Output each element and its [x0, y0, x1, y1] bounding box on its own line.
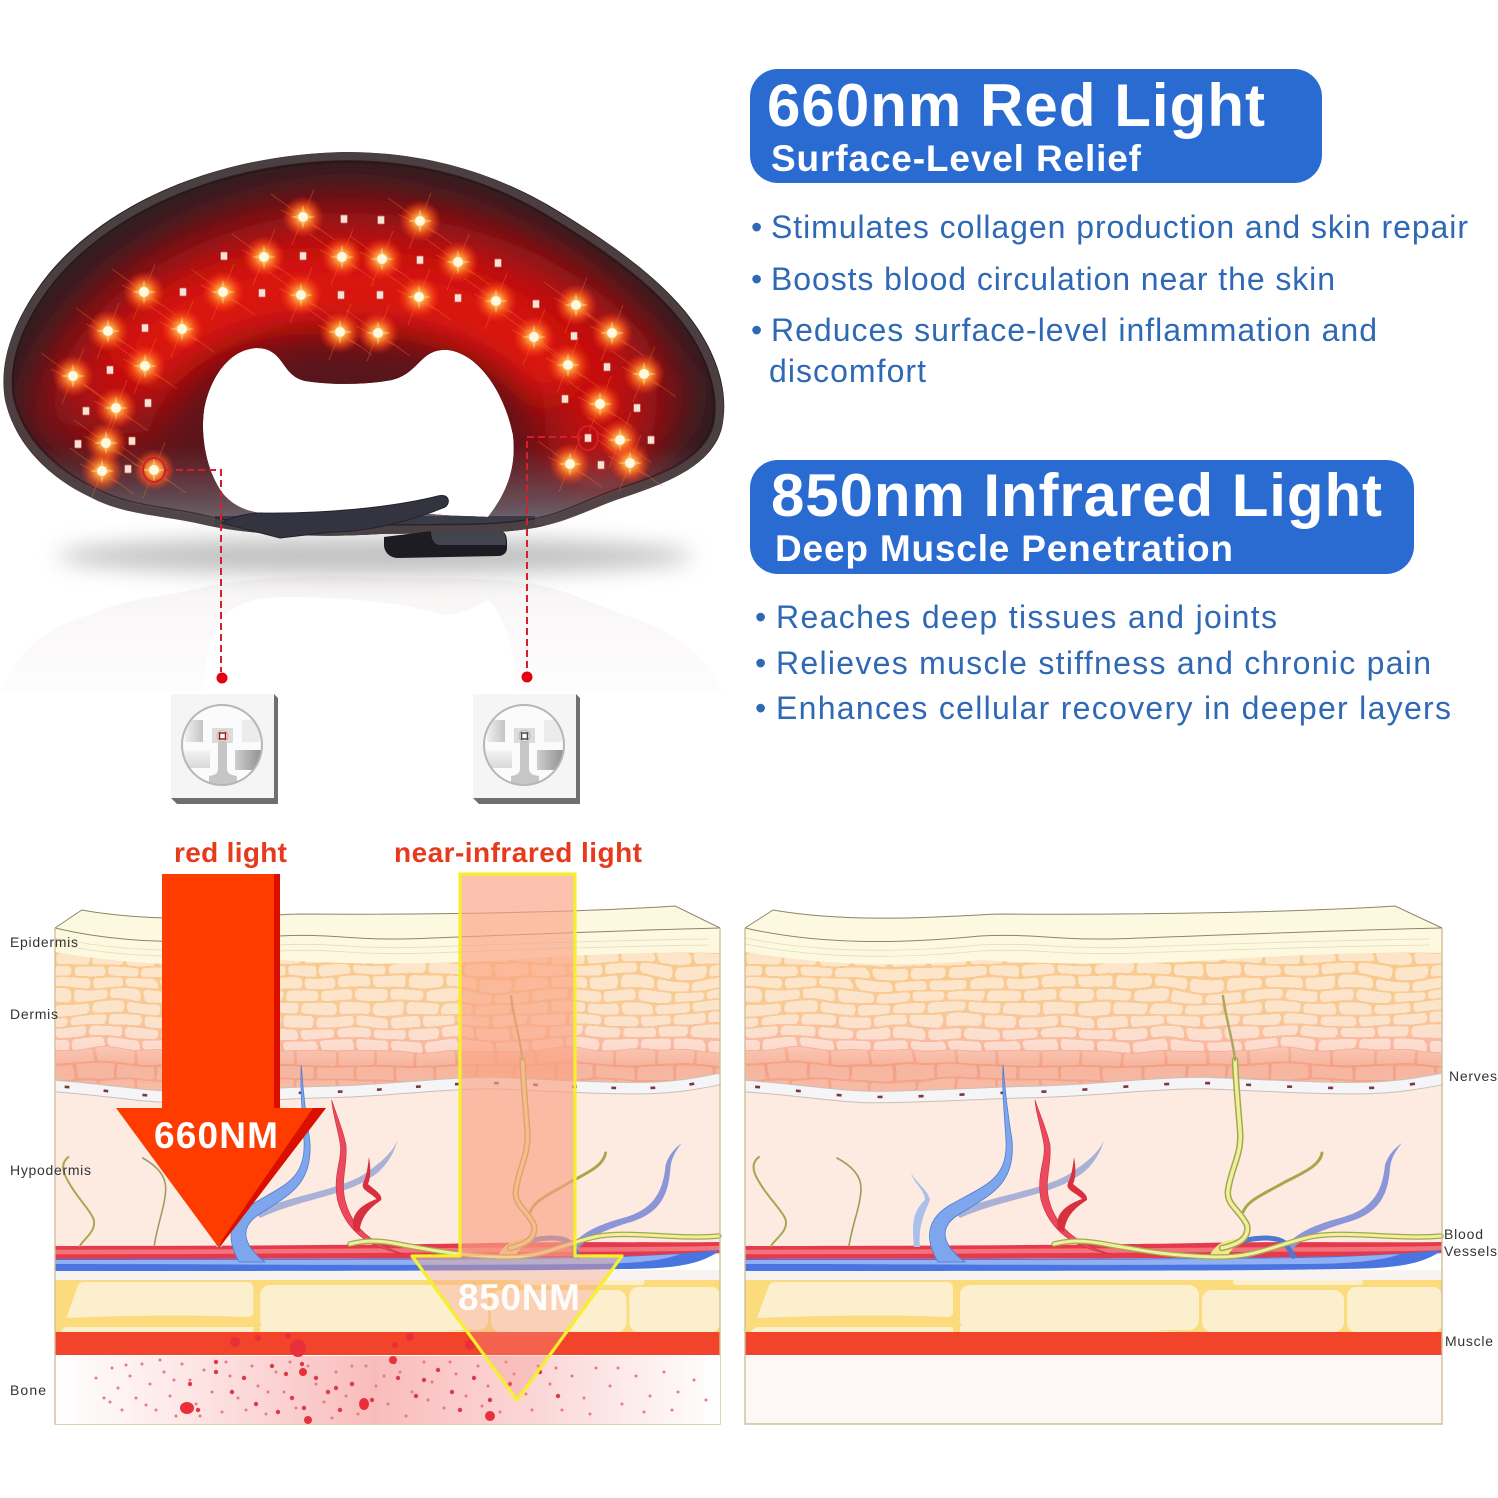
text block: 850nm benefits: • [755, 690, 766, 726]
label: Blood Vessels [1444, 1226, 1497, 1259]
callout: infrared LED connector [522, 426, 598, 682]
icon: infrared LED chip [473, 694, 580, 804]
hypodermis layer [745, 1085, 1442, 1255]
text block: 660nm benefits: Stimulates collagen production and skin repair [771, 209, 1468, 245]
panel: red light neck wrap device [0, 150, 730, 558]
subheading: deep muscle: Deep Muscle Penetration [775, 528, 1233, 569]
heading: 850nm: 850nm Infrared Light [771, 462, 1382, 529]
basal cell band [745, 1079, 1442, 1097]
text block: 850nm benefits: • [755, 599, 766, 635]
nerves [754, 996, 1441, 1258]
label: Dermis: Dermis [10, 1006, 58, 1022]
panel border [745, 928, 1442, 1424]
label: Blood Vessels: Blood [1444, 1226, 1483, 1242]
label: Bone: Bone [10, 1382, 46, 1398]
blood speckles small [96, 1360, 706, 1418]
bone layer [745, 1356, 1442, 1424]
label: Hypodermis: Hypodermis [10, 1162, 91, 1178]
subheading: surface relief: Surface-Level Relief [771, 138, 1142, 179]
device shadow [57, 537, 693, 575]
controller [384, 531, 507, 558]
text block: 660nm benefits: • [751, 261, 762, 297]
label: 850NM: 850NM [458, 1277, 580, 1318]
bone red light scatter [56, 1333, 720, 1424]
arrow: 850nm near-infrared light [412, 874, 622, 1400]
heading: 660nm: 660nm Red Light [767, 72, 1265, 139]
text block: 660nm benefits: • [751, 209, 762, 245]
label: 660NM: 660NM [154, 1115, 278, 1156]
wrap body [0, 150, 730, 545]
blood speckles large [180, 1333, 495, 1424]
text block: 660nm benefits [751, 209, 1468, 389]
arrow: 660nm red light [116, 874, 326, 1248]
epidermis layer [745, 906, 1442, 968]
lower membrane [745, 1270, 1442, 1280]
veins and arteries [911, 1065, 1402, 1262]
blood vessels horizontal [745, 1242, 1442, 1271]
label: near-infrared light: near-infrared light [394, 837, 642, 868]
panel: skin cross-section treated [41, 906, 737, 1424]
label: Blood Vessels: Vessels [1444, 1243, 1497, 1259]
text block: 660nm benefits: Reduces surface-level inflammation and [771, 312, 1377, 348]
text block: 850nm benefits [755, 599, 1451, 726]
text block: 850nm benefits: Relieves muscle stiffness and chronic pain [776, 645, 1431, 681]
text block: 850nm benefits: • [755, 645, 766, 681]
muscle layer [745, 1332, 1442, 1355]
panel: skin cross-section untreated [730, 906, 1460, 1424]
icon: red LED chip [171, 694, 278, 804]
label: Muscle: Muscle [1445, 1333, 1493, 1349]
label: red light: red light [174, 837, 287, 868]
fat layer [745, 1274, 1442, 1332]
label: Nerves: Nerves [1449, 1068, 1497, 1084]
blood speckles medium [190, 1362, 558, 1412]
text block: 660nm benefits: • [751, 312, 762, 348]
text block: 660nm benefits: discomfort [769, 353, 926, 389]
text block: 660nm benefits: Boosts blood circulation near the skin [771, 261, 1335, 297]
glowing red LEDs [41, 189, 676, 499]
control strap [222, 495, 448, 538]
device reflection [2, 576, 722, 692]
dermis brick cells [730, 940, 1460, 1110]
callout: red LED connector [143, 458, 228, 684]
panel: 660nm heading [750, 69, 1322, 183]
label: Epidermis: Epidermis [10, 934, 78, 950]
unlit infrared LEDs [75, 215, 654, 473]
panel: 850nm heading [750, 460, 1414, 574]
text block: 850nm benefits: Enhances cellular recovery in deeper layers [776, 690, 1451, 726]
text block: 850nm benefits: Reaches deep tissues and joints [776, 599, 1277, 635]
